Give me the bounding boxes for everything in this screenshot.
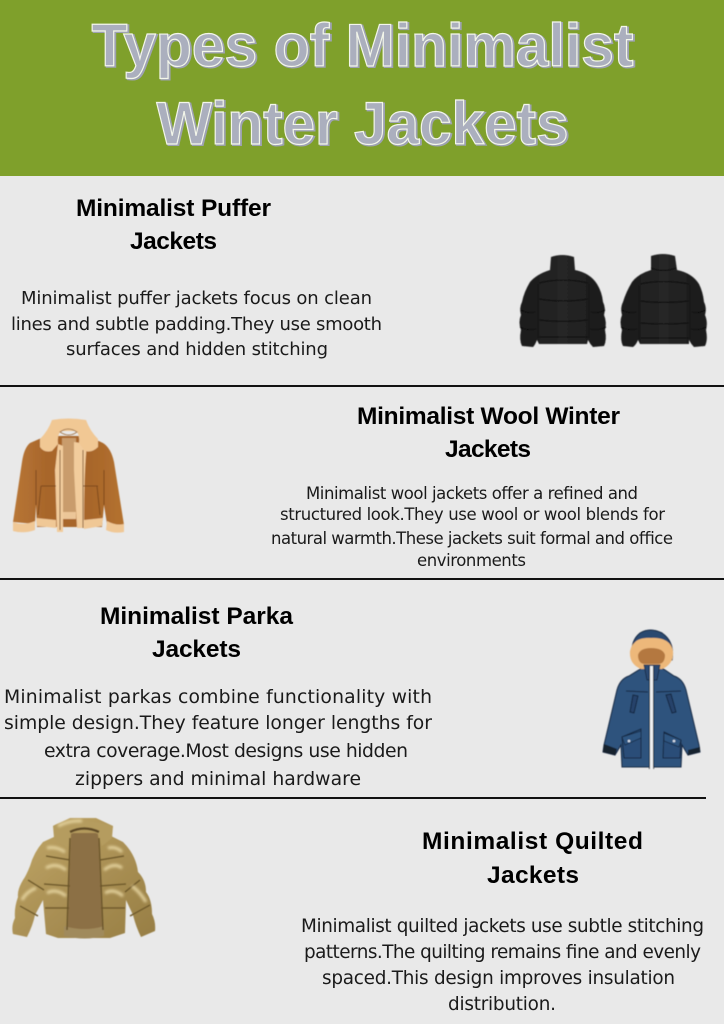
section: quilted jackets xyxy=(12,818,704,1015)
heading: wool xyxy=(357,403,620,463)
divider 1 xyxy=(0,385,724,387)
heading: parka xyxy=(100,603,293,663)
heading: puffer: Minimalist Puffer xyxy=(76,195,271,222)
text: quilted description: patterns.The quilting remains fine and evenly xyxy=(304,942,701,963)
text: puffer description: surfaces and hidden stitching xyxy=(66,339,328,360)
icon: navy parka with fur hood xyxy=(603,630,700,769)
divider 3 xyxy=(0,797,706,799)
text: parka description: zippers and minimal hardware xyxy=(75,769,361,790)
text: quilted description: Minimalist quilted jackets use subtle stitching xyxy=(301,916,704,937)
heading: quilted xyxy=(422,828,643,889)
heading: quilted: Jackets xyxy=(487,862,579,889)
section: parka jackets xyxy=(4,603,700,790)
text: parka description: extra coverage.Most designs use hidden xyxy=(44,741,408,762)
text: quilted description: distribution. xyxy=(448,994,556,1015)
icon: gold quilted jacket xyxy=(12,818,155,938)
heading: wool: Jackets xyxy=(445,436,531,463)
text: wool description: natural warmth.These jackets suit formal and office xyxy=(271,529,673,548)
text: wool description: structured look.They use wool or wool blends for xyxy=(280,505,665,524)
title: Winter Jackets xyxy=(158,91,570,158)
text: parka description: Minimalist parkas combine functionality with xyxy=(4,687,432,708)
heading: parka: Jackets xyxy=(152,636,241,663)
text: parka description: simple design.They feature longer lengths for xyxy=(4,713,432,734)
text: wool description xyxy=(271,484,673,570)
section: wool jackets xyxy=(13,403,673,570)
title: Types of Minimalist xyxy=(92,12,634,79)
heading: puffer xyxy=(76,195,271,255)
header band xyxy=(0,0,724,176)
text: puffer description xyxy=(11,288,382,360)
heading: parka: Minimalist Parka xyxy=(100,603,293,630)
heading: wool: Minimalist Wool Winter xyxy=(357,403,620,430)
text: parka description xyxy=(4,687,432,790)
icon: black puffer jacket front and back xyxy=(520,254,707,347)
text: puffer description: Minimalist puffer jackets focus on clean xyxy=(21,288,372,309)
title: Types of Minimalist xyxy=(93,13,635,80)
title: Winter Jackets xyxy=(156,90,568,157)
text: quilted description: spaced.This design improves insulation xyxy=(322,968,675,989)
text: puffer description: lines and subtle padding.They use smooth xyxy=(11,314,382,335)
divider 2 xyxy=(0,578,724,580)
heading: puffer: Jackets xyxy=(130,228,217,255)
heading: quilted: Minimalist Quilted xyxy=(422,828,643,855)
section: puffer jackets xyxy=(11,195,707,360)
title xyxy=(92,12,635,158)
text: wool description: Minimalist wool jackets offer a refined and xyxy=(306,484,638,503)
text: wool description: environments xyxy=(417,551,526,570)
text: quilted description xyxy=(301,916,704,1015)
icon: brown shearling jacket xyxy=(13,418,124,533)
